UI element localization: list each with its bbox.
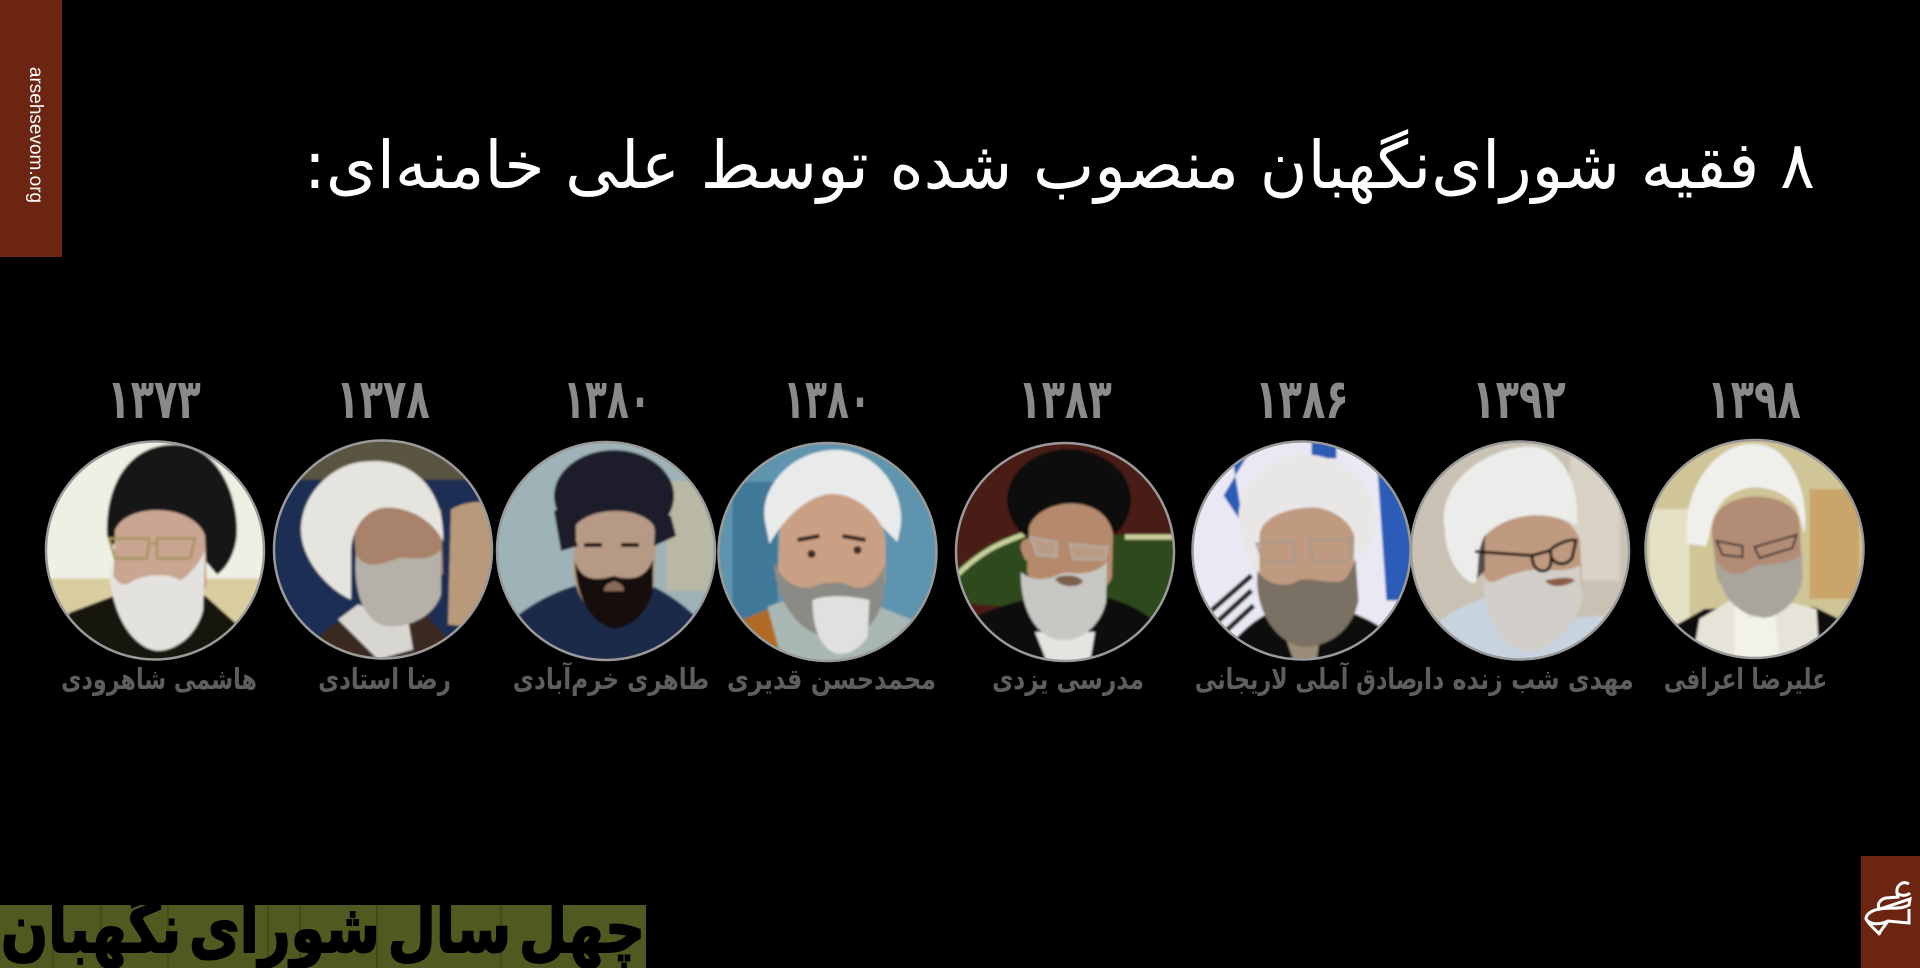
- portrait: Mohammad-Hasan Ghadiri: [718, 442, 938, 662]
- name: Shab-Zendedar: مهدی شب زنده دار: [1408, 664, 1634, 697]
- year: 1378: ۱۳۷۸: [336, 368, 430, 432]
- year: 1383: ۱۳۸۳: [1018, 368, 1112, 432]
- portrait: Alireza Arafi: [1644, 439, 1864, 659]
- portrait: Modarresi Yazdi: [955, 442, 1175, 662]
- name: Taheri Khorramabadi: طاهری خرم‌آبادی: [513, 661, 709, 697]
- site tab: arsehsevom.org: arsehsevom.org: [25, 67, 46, 203]
- portrait: Mahdi Shab-Zendedar: [1410, 440, 1630, 660]
- year: 1380: ۱۳۸۰: [563, 367, 651, 431]
- portrait: Hashemi Shahroudi: [45, 440, 265, 660]
- name: Modarresi Yazdi: مدرسی یزدی: [992, 664, 1144, 697]
- name: Hashemi Shahroudi: هاشمی شاهرودی: [61, 663, 257, 697]
- year: 1398: ۱۳۹۸: [1707, 368, 1801, 432]
- name: Reza Ostadi: رضا استادی: [318, 664, 451, 697]
- site tab: arsehsevom.org: [0, 0, 62, 257]
- name: Amoli Larijani: صادق آملی لاریجانی: [1195, 661, 1417, 697]
- portrait: Taheri Khorramabadi: [496, 441, 716, 661]
- portrait: Reza Ostadi: [273, 440, 493, 660]
- title: ۸ فقیه شورای‌نگهبان منصوب شده توسط علی خامنه‌ای:: [304, 128, 1815, 204]
- name: Arafi: علیرضا اعرافی: [1664, 663, 1827, 697]
- portrait: Sadegh Amoli Larijani: [1192, 440, 1412, 660]
- footer banner: forty years of the Guardian Council: چهل سال شورای نگهبان: [1, 888, 645, 968]
- year: 1392: ۱۳۹۲: [1472, 368, 1566, 432]
- logo tab: [1861, 856, 1920, 968]
- name: Ghadiri: محمدحسن قدیری: [727, 663, 936, 697]
- year: 1386: ۱۳۸۶: [1255, 368, 1349, 432]
- year: 1380: ۱۳۸۰: [783, 367, 871, 431]
- year: 1373: ۱۳۷۳: [107, 368, 201, 432]
